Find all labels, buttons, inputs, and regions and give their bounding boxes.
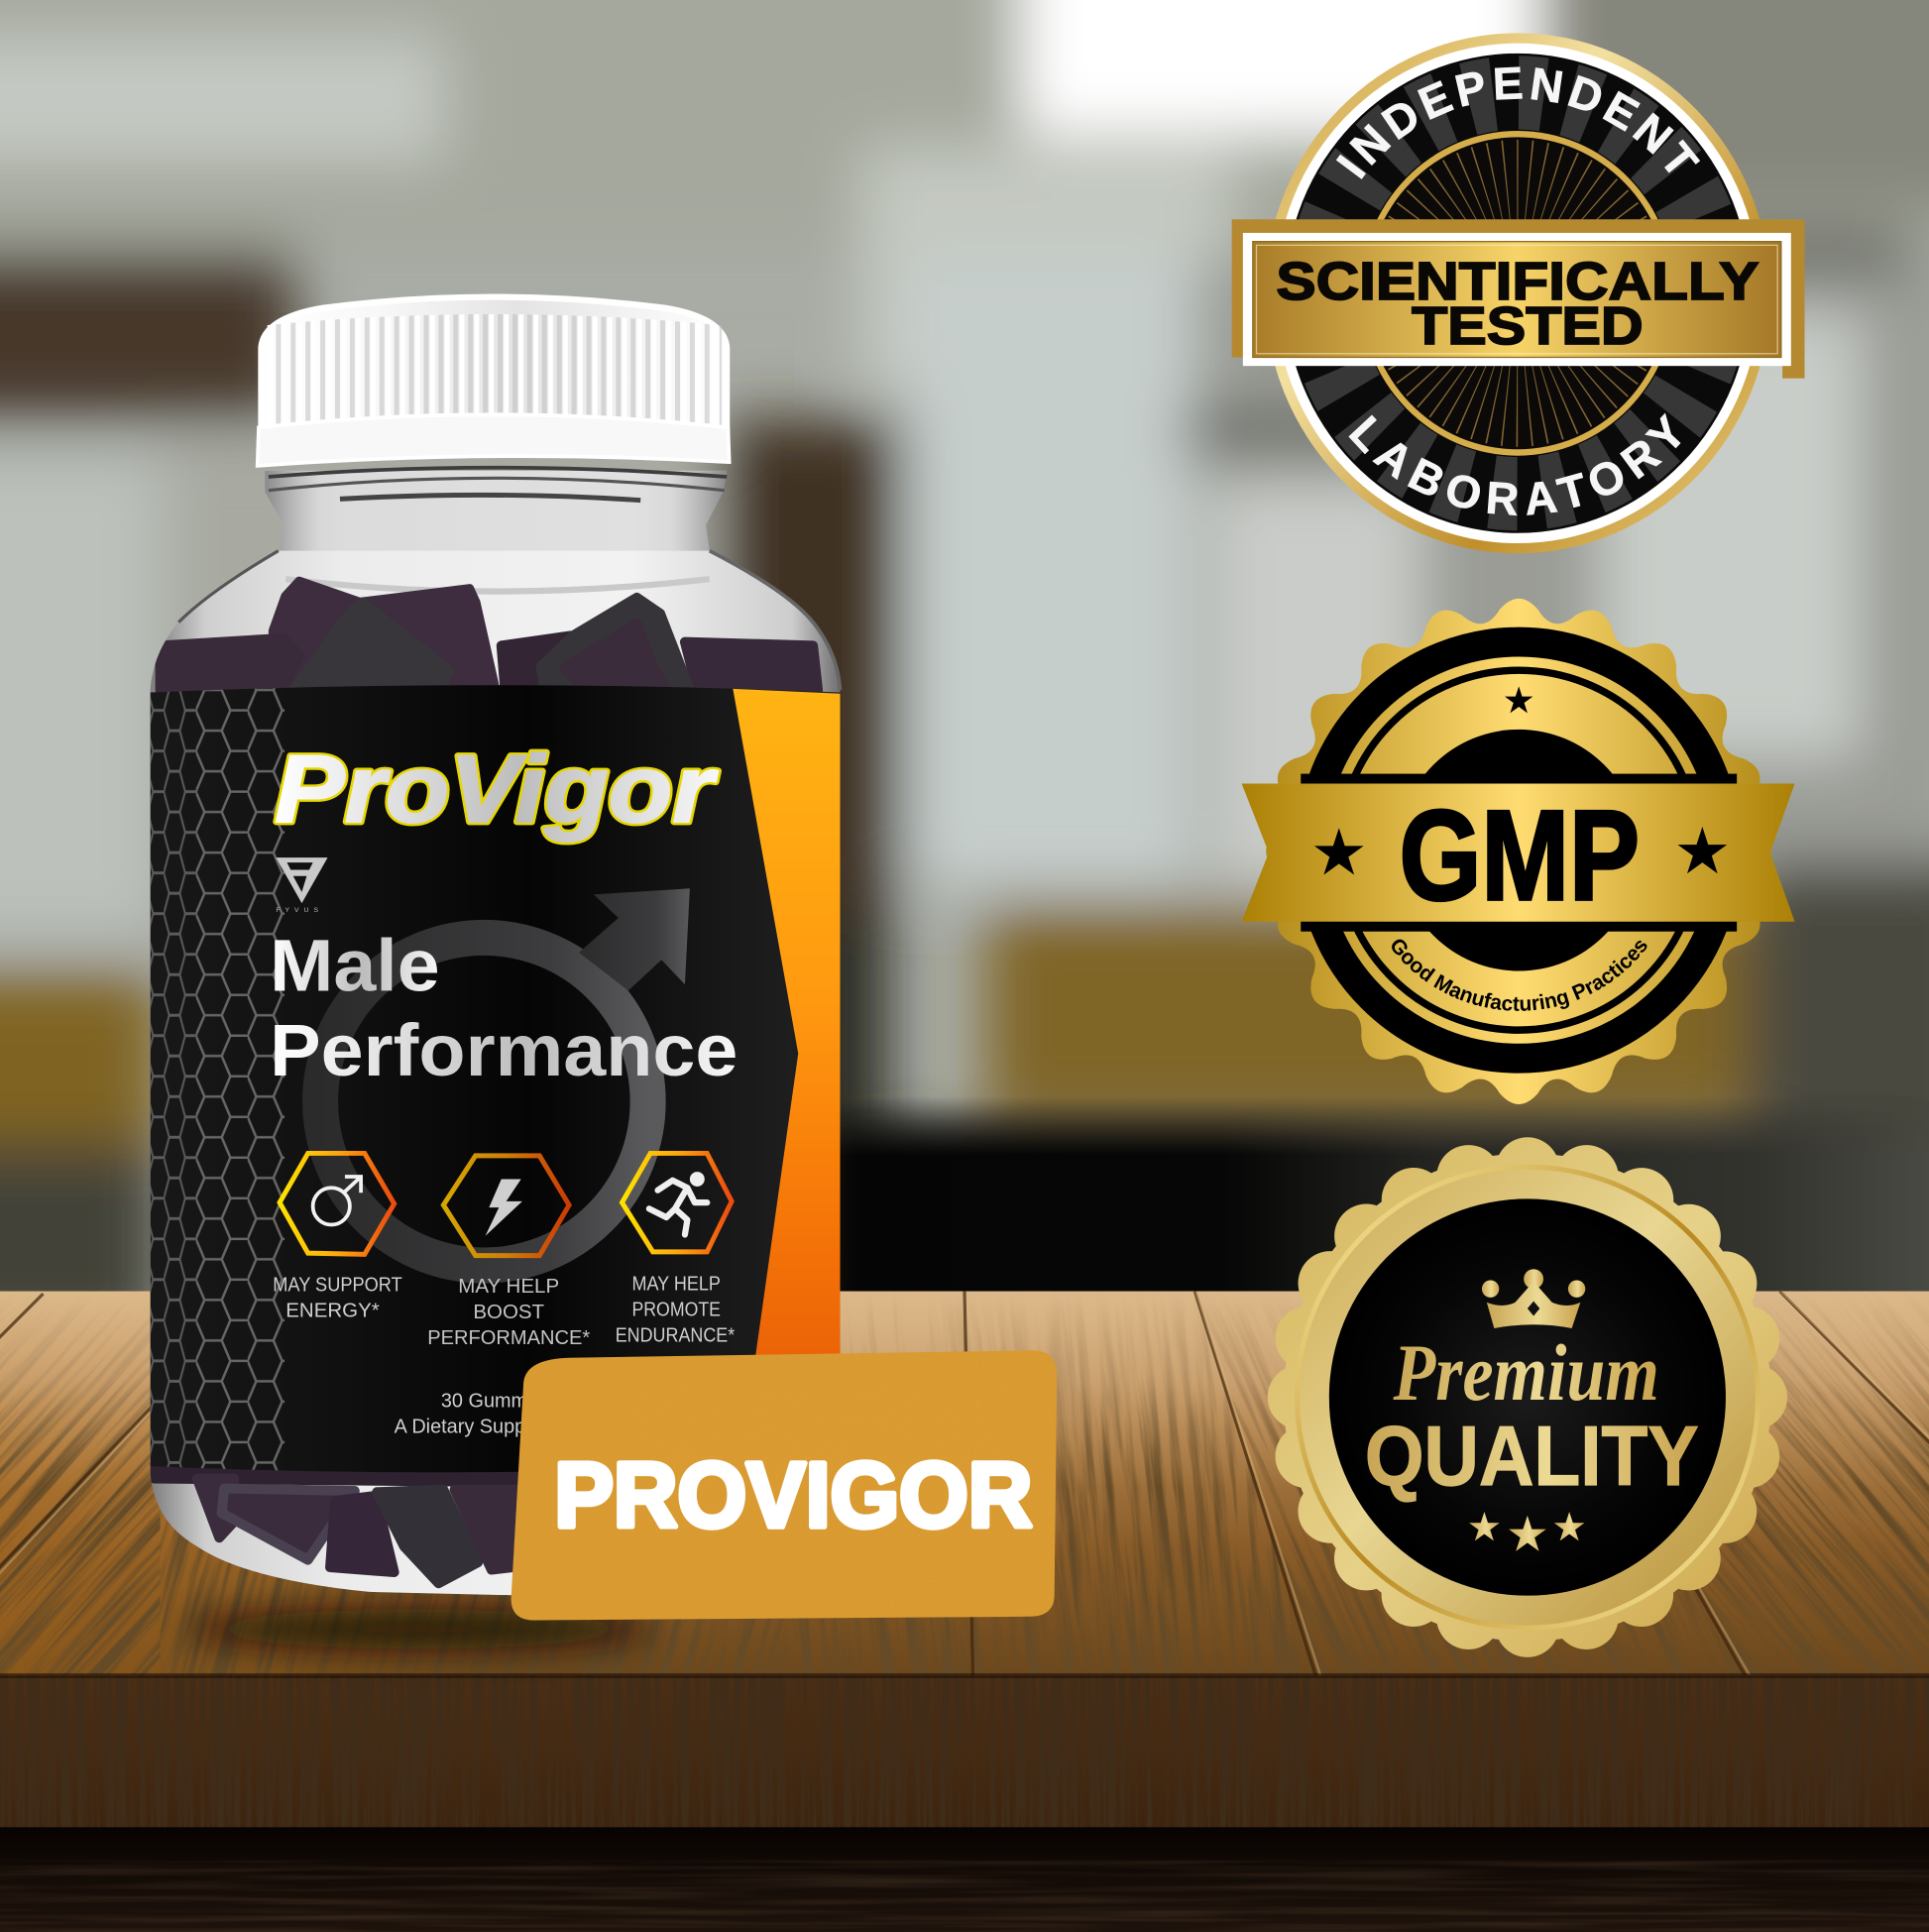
wooden table front edge xyxy=(0,1673,1929,1932)
benefit caption: performance: PERFORMANCE* xyxy=(427,1326,590,1349)
badge: premium quality xyxy=(1284,1153,1771,1642)
ribbon front xyxy=(1243,233,1791,366)
icon: hexagon lightning bolt xyxy=(443,1156,569,1256)
count and supplement line xyxy=(395,1390,585,1438)
icon: crown xyxy=(1482,1269,1585,1328)
ribbon stars xyxy=(1314,827,1727,875)
wooden table top with planks xyxy=(0,1292,1929,1685)
large male symbol xyxy=(320,888,690,1266)
badge heading xyxy=(1276,253,1759,356)
GMP text: GMP xyxy=(1400,784,1640,927)
benefit caption: energy: ENERGY* xyxy=(285,1300,380,1322)
glass body xyxy=(151,471,840,1599)
badge heading: TESTED xyxy=(1412,297,1644,356)
Male Performance heading: Performance xyxy=(270,1009,738,1091)
benefit caption: performance: BOOST xyxy=(473,1301,545,1323)
arc text: independent: INDEPENDENT xyxy=(1336,66,1701,179)
icon: hexagon male xyxy=(280,1153,395,1254)
bottle xyxy=(151,297,840,1599)
ProVigor logotype: ProVigor xyxy=(275,735,719,843)
benefit caption: endurance xyxy=(616,1272,735,1347)
product name card: PROVIGOR xyxy=(554,1443,1032,1546)
Male Performance heading: Male xyxy=(270,924,440,1006)
badge: scientifically tested xyxy=(1231,33,1804,553)
product name card xyxy=(505,1343,1066,1627)
bottle cap xyxy=(258,297,730,466)
three stars xyxy=(1469,1512,1585,1551)
count and supplement line: 30 Gummies xyxy=(441,1390,553,1412)
badge heading: SCIENTIFICALLY xyxy=(1276,253,1759,311)
gummies at top of jar xyxy=(154,582,818,1583)
label xyxy=(151,678,840,1485)
QUALITY: QUALITY xyxy=(1365,1409,1699,1504)
Fyvus logo xyxy=(276,857,328,914)
count and supplement line: A Dietary Supplement xyxy=(395,1417,585,1438)
benefit caption: endurance: MAY HELP xyxy=(631,1272,721,1295)
benefit caption: endurance: PROMOTE xyxy=(631,1299,721,1321)
background: blurred room interior xyxy=(0,0,1929,1343)
neck tint and highlights xyxy=(178,468,840,690)
orange side panel xyxy=(733,689,840,1368)
gummies at bottom of jar xyxy=(151,1463,518,1588)
benefit caption: energy xyxy=(273,1274,402,1322)
bottle shadow xyxy=(184,1609,653,1648)
gold ribbon xyxy=(1242,784,1795,922)
dark underside xyxy=(0,1827,1929,1932)
ribbon back xyxy=(1232,219,1804,379)
hexagon pattern strip xyxy=(151,684,284,1479)
Male Performance heading xyxy=(270,924,738,1091)
ProVigor logotype: ProVigor xyxy=(275,735,719,843)
arc text: laboratory: LABORATORY xyxy=(1348,412,1681,515)
benefit caption: endurance: ENDURANCE* xyxy=(616,1324,735,1347)
Premium script: Premium xyxy=(1393,1327,1659,1418)
badge: GMP xyxy=(1241,599,1794,1104)
arc text: good manufacturing practices: Good Manufacturing Practices xyxy=(1392,940,1647,1011)
dark floor behind table xyxy=(841,1100,1929,1291)
icon: hexagon runner xyxy=(623,1153,732,1252)
benefit caption: performance: MAY HELP xyxy=(458,1275,559,1298)
Fyvus logo: FYVUS xyxy=(276,907,323,914)
benefit caption: performance xyxy=(427,1275,590,1349)
benefit caption: energy: MAY SUPPORT xyxy=(273,1274,402,1297)
